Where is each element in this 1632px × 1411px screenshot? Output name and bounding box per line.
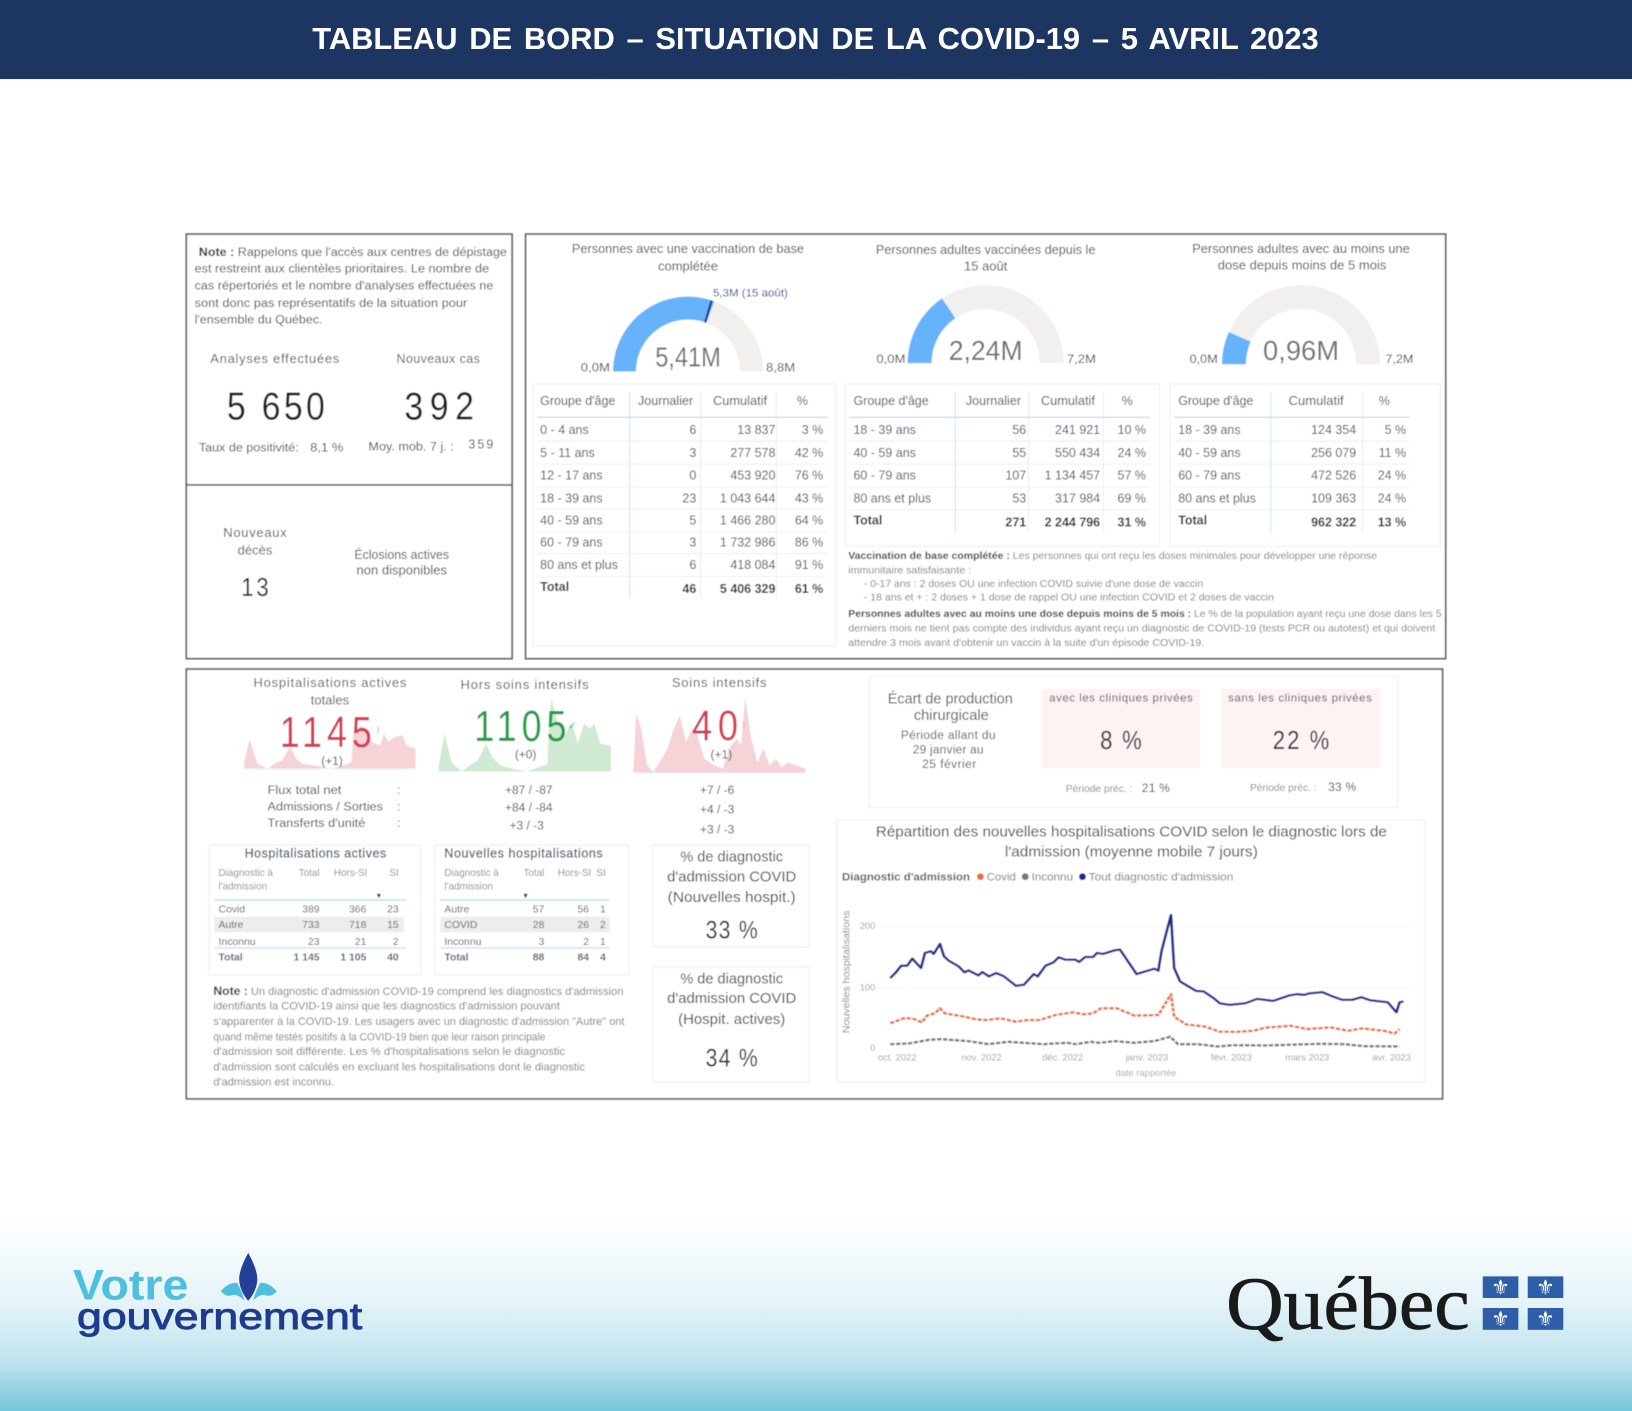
table: au moins une dose: Groupe d'âge [1178,394,1253,408]
table: vaccination de base par âge: 43 % [795,492,823,506]
table: adultes vaccinés depuis le 15 août: 60 - 79 ans [853,469,916,483]
table: nouvelles hospitalisations: l'admission [444,882,493,893]
gauge: adultes vaccinées depuis le 15 août: 7,2M [1067,352,1096,366]
surgery production gap box: chirurgicale [914,708,989,724]
surgery production gap box: Période allant du [901,728,996,742]
surgery production gap box: 29 janvier au [913,742,984,756]
table: hospitalisations actives: 733 [302,920,320,931]
table: nouvelles hospitalisations: 2 [600,920,606,931]
gauge: adultes vaccinées depuis le 15 août: 15 août [964,259,1008,274]
KPI: % diagnostic nouvelles hospit.: 33 % [706,916,758,944]
table: au moins une dose: 60 - 79 ans [1178,469,1241,483]
chart legend: Covid [987,871,1016,883]
series: tout diagnostic [890,915,1404,1012]
table: vaccination de base par âge: Groupe d'âge [540,394,615,408]
chart legend [842,871,1233,883]
table: au moins une dose: 24 % [1378,492,1406,506]
table: au moins une dose: 40 - 59 ans [1178,446,1241,460]
gauge: vaccination de base: 0,0M [581,360,610,374]
flux table: : [397,816,400,830]
table: vaccination de base par âge: 453 920 [730,469,775,483]
logo: Votre gouvernement: gouvernement [77,1295,363,1337]
KPI: % diagnostic hospit. actives [653,967,809,1082]
KPI: % diagnostic nouvelles hospit.: % de diagnostic [680,850,783,866]
table: adultes vaccinés depuis le 15 août: Groupe d'âge [853,394,929,408]
table: hospitalisations actives: 23 [387,905,399,916]
table: hospitalisations actives: Autre [219,920,244,931]
card: sans les cliniques privées: sans les cliniques privées [1228,692,1372,704]
table: vaccination de base par âge [533,384,836,646]
line chart: nouvelles hospitalisations [837,820,1425,1082]
table: hospitalisations actives: Diagnostic à [219,868,273,879]
KPI: % diagnostic hospit. actives: % de diagnostic [680,971,783,987]
table: nouvelles hospitalisations: SI [596,868,606,879]
gauge: vaccination de base: 5,41M [655,341,721,372]
KPI: nouveaux cas: Nouveaux cas [397,352,480,366]
table: vaccination de base par âge: 40 - 59 ans [540,513,603,527]
KPI: % diagnostic hospit. actives: 34 % [706,1044,758,1072]
title: TABLEAU DE BORD – SITUATION DE LA COVID-19 – 5 AVRIL 2023 [312,21,1319,56]
hospitalisation note: d'admission sont calculés en excluant les hospitalisations dont le diagnostic [213,1062,585,1074]
icon: Québec flag: ⚜ [1491,1275,1510,1299]
table: vaccination de base par âge: 5 [689,513,696,527]
surgery production gap box [869,676,1398,807]
card: sans les cliniques privées: 33 % [1328,780,1357,794]
table: vaccination de base par âge: 42 % [795,446,823,460]
table: adultes vaccinés depuis le 15 août: 1 134 457 [1045,469,1100,483]
table: vaccination de base par âge: 1 732 986 [720,535,775,549]
x axis: oct. 2022 [878,1052,916,1062]
gauge: adultes vaccinées depuis le 15 août: Personnes adultes vaccinées depuis le [876,242,1095,257]
x axis: nov. 2022 [961,1052,1002,1062]
note on testing: sont donc pas représentatifs de la situation pour [195,296,467,310]
flux table: +84 / -84 [505,801,553,815]
table: vaccination de base par âge: 5 - 11 ans [540,446,595,460]
KPI: hospitalisations actives totales [244,675,415,769]
table: nouvelles hospitalisations: Total [444,952,469,963]
card: sans les cliniques privées: Période préc. : [1250,783,1317,794]
table: vaccination de base par âge: 0 - 4 ans [540,423,589,437]
table: au moins une dose: 124 354 [1311,423,1356,437]
table: nouvelles hospitalisations: 28 [533,920,545,931]
table: nouvelles hospitalisations [435,845,629,975]
table: hospitalisations actives: 21 [355,937,367,948]
icon: lily petal [221,1253,277,1301]
hospitalisation note: Note : Un diagnostic d'admission COVID-19 comprend les diagnostics d'admission [213,984,623,998]
table: nouvelles hospitalisations: 84 [578,952,589,963]
table: vaccination de base par âge: 12 - 17 ans [540,469,603,483]
flux table: Flux total net [267,783,342,797]
table: au moins une dose: 11 % [1379,446,1406,460]
logo: Votre gouvernement [73,1253,363,1337]
table: hospitalisations actives: Total [299,868,320,879]
hospitalisation note: d'admission est inconnu. [213,1076,334,1088]
surgery production gap box: Écart de production [888,690,1013,707]
table: au moins une dose: 18 - 39 ans [1178,423,1241,437]
vaccination definitions note: - 0-17 ans : 2 doses OU une infection COVID suivie d'une dose de vaccin [864,579,1203,590]
table: au moins une dose: 962 322 [1311,516,1356,530]
table: adultes vaccinés depuis le 15 août: 317 984 [1055,492,1100,506]
KPI: nouveaux cas [368,352,493,454]
table: hospitalisations actives: 366 [349,905,367,916]
gauge: adultes vaccinées depuis le 15 août [876,242,1096,366]
card: avec les cliniques privées [1042,689,1200,795]
KPI: hospitalisations actives totales: totales [311,692,350,707]
table: vaccination de base par âge: 418 084 [730,558,775,572]
table: nouvelles hospitalisations: COVID [444,920,477,931]
table: adultes vaccinés depuis le 15 août: 80 ans et plus [853,492,931,506]
table: nouvelles hospitalisations: 57 [533,905,545,916]
table: hospitalisations actives: 718 [349,920,367,931]
table: adultes vaccinés depuis le 15 août: 57 % [1118,469,1146,483]
gauge: vaccination de base: 8,8M [766,360,795,374]
hospitalisation note [213,984,624,1088]
table: vaccination de base par âge: 277 578 [730,446,775,460]
table: vaccination de base par âge: 5 406 329 [720,582,775,596]
table: nouvelles hospitalisations: 3 [539,937,545,948]
logo: Québec [1226,1263,1563,1346]
table: nouvelles hospitalisations: 56 [578,905,589,916]
gauge: adultes vaccinées depuis le 15 août: 0,0M [876,352,906,366]
table: hospitalisations actives: 1 105 [340,952,367,963]
icon: Québec flag [1483,1275,1563,1331]
vaccination definitions note: Personnes adultes avec au moins une dose depuis moins de 5 mois : Le % de la population ayant reçu une dose dans les 5 [848,609,1442,620]
table: au moins une dose: 472 526 [1311,469,1356,483]
table: hospitalisations actives: Total [219,952,243,963]
gauge: au moins une dose depuis moins de 5 mois: 0,0M [1190,352,1218,366]
icon: Québec flag: ⚜ [1536,1275,1555,1299]
footer gradient band [0,1217,1632,1411]
chart title: l'admission (moyenne mobile 7 jours) [1005,844,1258,860]
hospitalisation note: identifiants la COVID-19 ainsi que les diagnostics d'admission pouvant [213,1000,560,1012]
table: vaccination de base par âge: 91 % [795,558,823,572]
KPI: hors soins intensifs [439,677,611,771]
vaccination definitions note: Vaccination de base complétée : Les personnes qui ont reçu les doses minimales pour développer une réponse [848,551,1377,562]
KPI: % diagnostic hospit. actives: d'admission COVID [667,991,796,1007]
vaccination definitions note: derniers mois ne tient pas compte des individus ayant reçu un diagnostic de COVID-19 (tests PCR ou autotest) et qui doivent [848,624,1435,635]
table: vaccination de base par âge: 1 043 644 [720,492,775,506]
table: nouvelles hospitalisations: 1 [600,905,606,916]
table: vaccination de base par âge: 13 837 [737,423,775,437]
gauge: adultes vaccinées depuis le 15 août: 2,24M [949,335,1023,366]
table: adultes vaccinés depuis le 15 août: Total [853,513,882,527]
note on testing [195,245,507,327]
table: adultes vaccinés depuis le 15 août: 271 [1005,516,1026,530]
header banner [0,0,1632,79]
flux table: Admissions / Sorties [267,800,383,814]
icon: Québec flag: ⚜ [1536,1307,1555,1331]
table: hospitalisations actives: Covid [219,905,245,916]
table: adultes vaccinés depuis le 15 août: 2 244 796 [1045,516,1100,530]
table: vaccination de base par âge: 23 [682,492,696,506]
card: sans les cliniques privées [1221,689,1380,794]
flux table: +3 / -3 [700,822,735,836]
table: au moins une dose: 13 % [1378,516,1406,530]
table: vaccination de base par âge: % [797,394,808,408]
table: nouvelles hospitalisations: Total [523,868,544,879]
table: adultes vaccinés depuis le 15 août: 10 % [1118,423,1146,437]
table: vaccination de base par âge: Cumulatif [713,394,768,408]
KPI: soins intensifs: Soins intensifs [672,675,767,690]
KPI: nouveaux décès [223,525,287,603]
table: adultes vaccinés depuis le 15 août: 18 - 39 ans [853,423,916,437]
panel: vaccination [526,234,1446,659]
y axis: Nouvelles hospitalisations [841,910,852,1033]
y axis [841,910,875,1053]
table: adultes vaccinés depuis le 15 août: 53 [1012,492,1026,506]
vaccination definitions note: - 18 ans et + : 2 doses + 1 dose de rappel OU une infection COVID et 2 doses de vaccin [864,592,1274,603]
table: nouvelles hospitalisations: Autre [444,905,469,916]
KPI: hospitalisations actives totales: 1145 [280,709,372,757]
table: vaccination de base par âge: 3 [689,535,696,549]
table: hospitalisations actives: SI [389,868,399,879]
KPI: nouveaux cas: 392 [404,384,474,428]
KPI: nouveaux décès: décès [238,543,273,558]
table: hospitalisations actives [209,845,420,975]
gauge: au moins une dose depuis moins de 5 mois: Personnes adultes avec au moins une [1192,241,1410,256]
table: au moins une dose: 5 % [1385,423,1406,437]
table: adultes vaccinés depuis le 15 août: 55 [1012,446,1026,460]
table: nouvelles hospitalisations: Nouvelles hospitalisations [444,846,603,860]
table: nouvelles hospitalisations: 4 [600,952,606,963]
table: au moins une dose: 256 079 [1311,446,1356,460]
KPI: analyses effectuées [199,351,344,455]
table: adultes vaccinés depuis le 15 août: 24 % [1118,446,1146,460]
flux table: Transferts d'unité [267,816,366,830]
table: au moins une dose [1170,384,1440,546]
table: au moins une dose: 24 % [1378,469,1406,483]
hospitalisation note: d'admission soit différente. Les % d'hospitalisations selon le diagnostic [213,1046,566,1058]
x axis: déc. 2022 [1042,1052,1083,1062]
KPI: nouveaux décès: 13 [241,574,269,603]
table: vaccination de base par âge: 64 % [795,513,823,527]
table: adultes vaccinés depuis le 15 août: 550 434 [1055,446,1100,460]
x axis: date rapportée [1115,1068,1176,1078]
KPI: % diagnostic nouvelles hospit.: (Nouvelles hospit.) [668,890,796,906]
KPI: nouveaux cas: Moy. mob. 7 j. : [368,440,454,454]
card: avec les cliniques privées: Période préc. : [1066,784,1132,795]
gauge: vaccination de base: 5,3M (15 août) [713,288,788,300]
card: sans les cliniques privées: 22 % [1273,727,1329,756]
table: vaccination de base par âge: 1 466 280 [720,513,775,527]
table: adultes vaccinés depuis le 15 août: 31 % [1118,516,1146,530]
flux table: : [397,800,400,814]
table: vaccination de base par âge: 3 % [802,423,823,437]
table: au moins une dose: Total [1178,513,1207,527]
table: hospitalisations actives: Inconnu [219,937,256,948]
flux table: : [397,783,400,797]
logo: Votre gouvernement: Votre [73,1262,188,1310]
surgery production gap box: 25 février [922,757,976,771]
table: nouvelles hospitalisations: Diagnostic à [444,868,499,879]
table: adultes vaccinés depuis le 15 août: Journalier [966,394,1021,408]
KPI: hospitalisations actives totales: Hospitalisations actives [253,675,407,690]
table: hospitalisations actives: 40 [387,952,399,963]
gauge: au moins une dose depuis moins de 5 mois: dose depuis moins de 5 mois [1218,258,1387,273]
KPI: % diagnostic nouvelles hospit. [653,845,809,947]
KPI: hors soins intensifs: 1105 [474,703,566,751]
card: avec les cliniques privées: avec les cliniques privées [1049,692,1193,704]
KPI: soins intensifs: 40 [692,702,738,750]
table: adultes vaccinés depuis le 15 août: % [1122,394,1133,408]
gauge: vaccination de base: Personnes avec une vaccination de base [572,241,804,256]
KPI: hospitalisations actives totales: ! [377,726,380,738]
table: adultes vaccinés depuis le 15 août: 241 921 [1055,423,1100,437]
note on testing: l'ensemble du Québec. [195,313,323,327]
card: avec les cliniques privées: 21 % [1142,781,1170,795]
x axis [878,1052,1411,1078]
card: avec les cliniques privées: 8 % [1100,727,1142,756]
table: hospitalisations actives: Hospitalisations actives [245,846,386,860]
gauge: au moins une dose depuis moins de 5 mois: 0,96M [1263,335,1339,366]
table: vaccination de base par âge: 76 % [795,469,823,483]
hospitalisation note: quand même testés positifs à la COVID-19 bien que leur raison principale [213,1032,545,1044]
KPI: analyses effectuées: Taux de positivité: [199,441,299,455]
gauge: vaccination de base [572,241,804,374]
table: au moins une dose: 109 363 [1311,492,1356,506]
table: vaccination de base par âge: Total [540,580,569,594]
table: nouvelles hospitalisations: Inconnu [444,937,482,948]
vaccination definitions note [848,551,1442,649]
x axis: avr. 2023 [1372,1052,1411,1062]
KPI: soins intensifs [633,675,806,773]
KPI: % diagnostic hospit. actives: (Hospit. actives) [678,1012,785,1028]
KPI: analyses effectuées: 5 650 [227,384,325,428]
icon: Québec flag: ⚜ [1491,1307,1510,1331]
gauge: au moins une dose depuis moins de 5 mois: 7,2M [1385,352,1413,366]
chart title: Répartition des nouvelles hospitalisations COVID selon le diagnostic lors de [876,825,1387,841]
series: covid [890,994,1400,1033]
KPI: hospitalisations actives totales: (+1) [321,754,343,768]
flux table: +4 / -3 [700,803,735,817]
x axis: janv. 2023 [1125,1052,1168,1062]
KPI: hors soins intensifs: (+0) [515,748,536,762]
KPI: analyses effectuées: 8,1 % [310,441,344,455]
table: adultes vaccinés depuis le 15 août: 56 [1012,423,1026,437]
table: nouvelles hospitalisations: 26 [578,920,589,931]
KPI: analyses effectuées: Analyses effectuées [210,351,340,366]
gauge: vaccination de base: complétée [658,259,718,274]
flux table [267,783,735,836]
table: vaccination de base par âge: 6 [689,558,696,572]
note on testing: cas répertoriés et le nombre d'analyses effectuées ne [195,278,494,292]
KPI: % diagnostic nouvelles hospit.: d'admission COVID [667,869,796,885]
table: vaccination de base par âge: 46 [682,582,696,596]
table: hospitalisations actives: 1 145 [294,952,320,963]
KPI: hors soins intensifs: Hors soins intensifs [461,677,589,692]
table: au moins une dose: Cumulatif [1289,394,1344,408]
table: nouvelles hospitalisations: Hors-SI [558,868,591,879]
table: hospitalisations actives: ▼ [375,891,382,900]
table: nouvelles hospitalisations: 1 [600,937,606,948]
y axis: 200 [860,921,875,931]
y axis: 100 [860,983,875,993]
logo: Québec: Québec [1226,1263,1470,1346]
panel: hospitalisations [186,669,1443,1099]
KPI: nouveaux cas: 359 [468,437,493,451]
note on testing: est restreint aux clientèles prioritaires. Le nombre de [195,262,490,276]
table: vaccination de base par âge: 3 [689,446,696,460]
éclosions note: Éclosions actives [354,547,449,562]
flux table: +7 / -6 [700,783,735,797]
table: nouvelles hospitalisations: ▼ [522,891,529,900]
table: vaccination de base par âge: 0 [689,469,696,483]
table: vaccination de base par âge: 6 [689,423,696,437]
table: vaccination de base par âge: Journalier [638,394,693,408]
table: vaccination de base par âge: 86 % [795,535,823,549]
KPI: soins intensifs: ! [742,719,745,731]
table: adultes vaccinés depuis le 15 août: 69 % [1118,492,1146,506]
y axis: 0 [870,1043,875,1053]
table: nouvelles hospitalisations: 88 [533,952,545,963]
KPI: soins intensifs: (+1) [710,748,732,762]
table: hospitalisations actives: 23 [308,937,320,948]
table: adultes vaccinés depuis le 15 août [845,384,1159,546]
table: adultes vaccinés depuis le 15 août: 107 [1005,469,1026,483]
table: nouvelles hospitalisations: 2 [583,937,589,948]
chart legend: Diagnostic d'admission [842,871,970,883]
series: inconnu [890,1037,1400,1047]
vaccination definitions note: attendre 3 mois avant d'obtenir un vaccin à la suite d'un épisode COVID-19. [848,638,1204,649]
table: vaccination de base par âge: 60 - 79 ans [540,535,603,549]
vaccination definitions note: immunitaire satisfaisante : [848,565,971,576]
flux table: +87 / -87 [505,783,553,797]
table: hospitalisations actives: Hors-SI [334,868,367,879]
table: au moins une dose: 80 ans et plus [1178,492,1256,506]
table: hospitalisations actives: 2 [393,937,399,948]
KPI: nouveaux décès: Nouveaux [223,525,287,540]
x axis: mars 2023 [1285,1052,1329,1062]
table: adultes vaccinés depuis le 15 août: Cumulatif [1041,394,1095,408]
table: adultes vaccinés depuis le 15 août: 40 - 59 ans [853,446,916,460]
KPI: hors soins intensifs: ✓ [568,720,577,732]
chart legend: Tout diagnostic d'admission [1089,871,1233,883]
table: hospitalisations actives: 389 [302,905,320,916]
hospitalisation note: s'apparenter à la COVID-19. Les usagers avec un diagnostic d'admission "Autre" ont [213,1016,624,1028]
éclosions note: non disponibles [356,563,447,577]
éclosions note [354,547,449,577]
note on testing: Note : Rappelons que l'accès aux centres de dépistage [199,245,507,259]
panel: tests and cases [186,234,512,659]
gauge: au moins une dose depuis moins de 5 mois [1190,241,1413,366]
table: hospitalisations actives: l'admission [219,882,267,893]
chart title [876,825,1387,860]
series lines [890,915,1404,1047]
table: vaccination de base par âge: 80 ans et plus [540,558,618,572]
table: vaccination de base par âge: 18 - 39 ans [540,492,603,506]
table: hospitalisations actives: 15 [387,920,399,931]
flux table: +3 / -3 [510,818,544,832]
chart legend: Inconnu [1031,871,1073,883]
table: au moins une dose: % [1379,394,1390,408]
x axis: févr. 2023 [1211,1052,1252,1062]
table: vaccination de base par âge: 61 % [795,582,823,596]
